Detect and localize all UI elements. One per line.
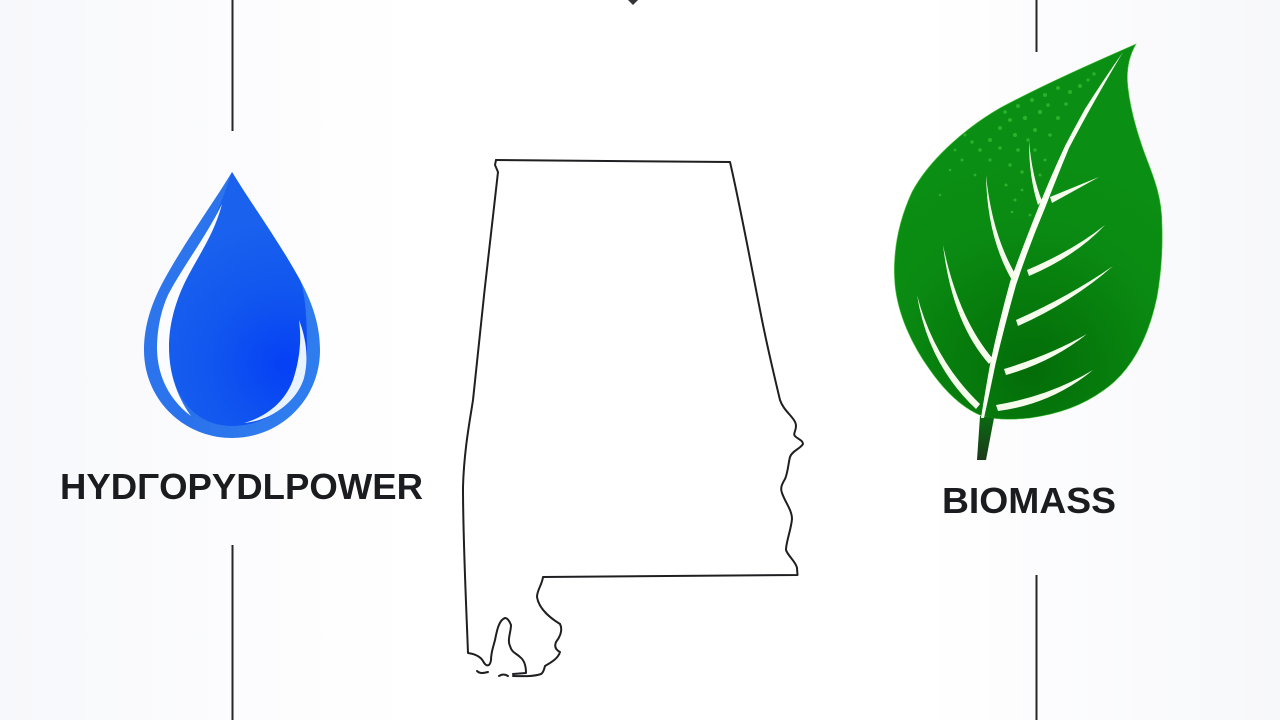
drop highlight: right crescent bbox=[244, 320, 306, 423]
label: hydropower: HYDΓOPYDLPOWER bbox=[60, 466, 423, 507]
right divider lines bbox=[1036, 0, 1038, 720]
drop inner body bbox=[169, 172, 307, 426]
leaf veins bbox=[917, 141, 1113, 411]
leaf stem bbox=[977, 416, 994, 460]
left divider lines bbox=[232, 0, 234, 720]
map: state outline bbox=[463, 160, 803, 676]
label: biomass: BIOMASS bbox=[942, 480, 1116, 521]
leaf blade bbox=[894, 44, 1162, 419]
drop highlight: left crescent bbox=[157, 204, 222, 416]
icon: leaf bbox=[894, 44, 1162, 460]
icon: water drop bbox=[144, 172, 320, 438]
leaf midrib bbox=[981, 52, 1123, 418]
top marker: cut-off arrow tip bbox=[628, 0, 638, 5]
leaf texture dots bbox=[939, 72, 1096, 216]
